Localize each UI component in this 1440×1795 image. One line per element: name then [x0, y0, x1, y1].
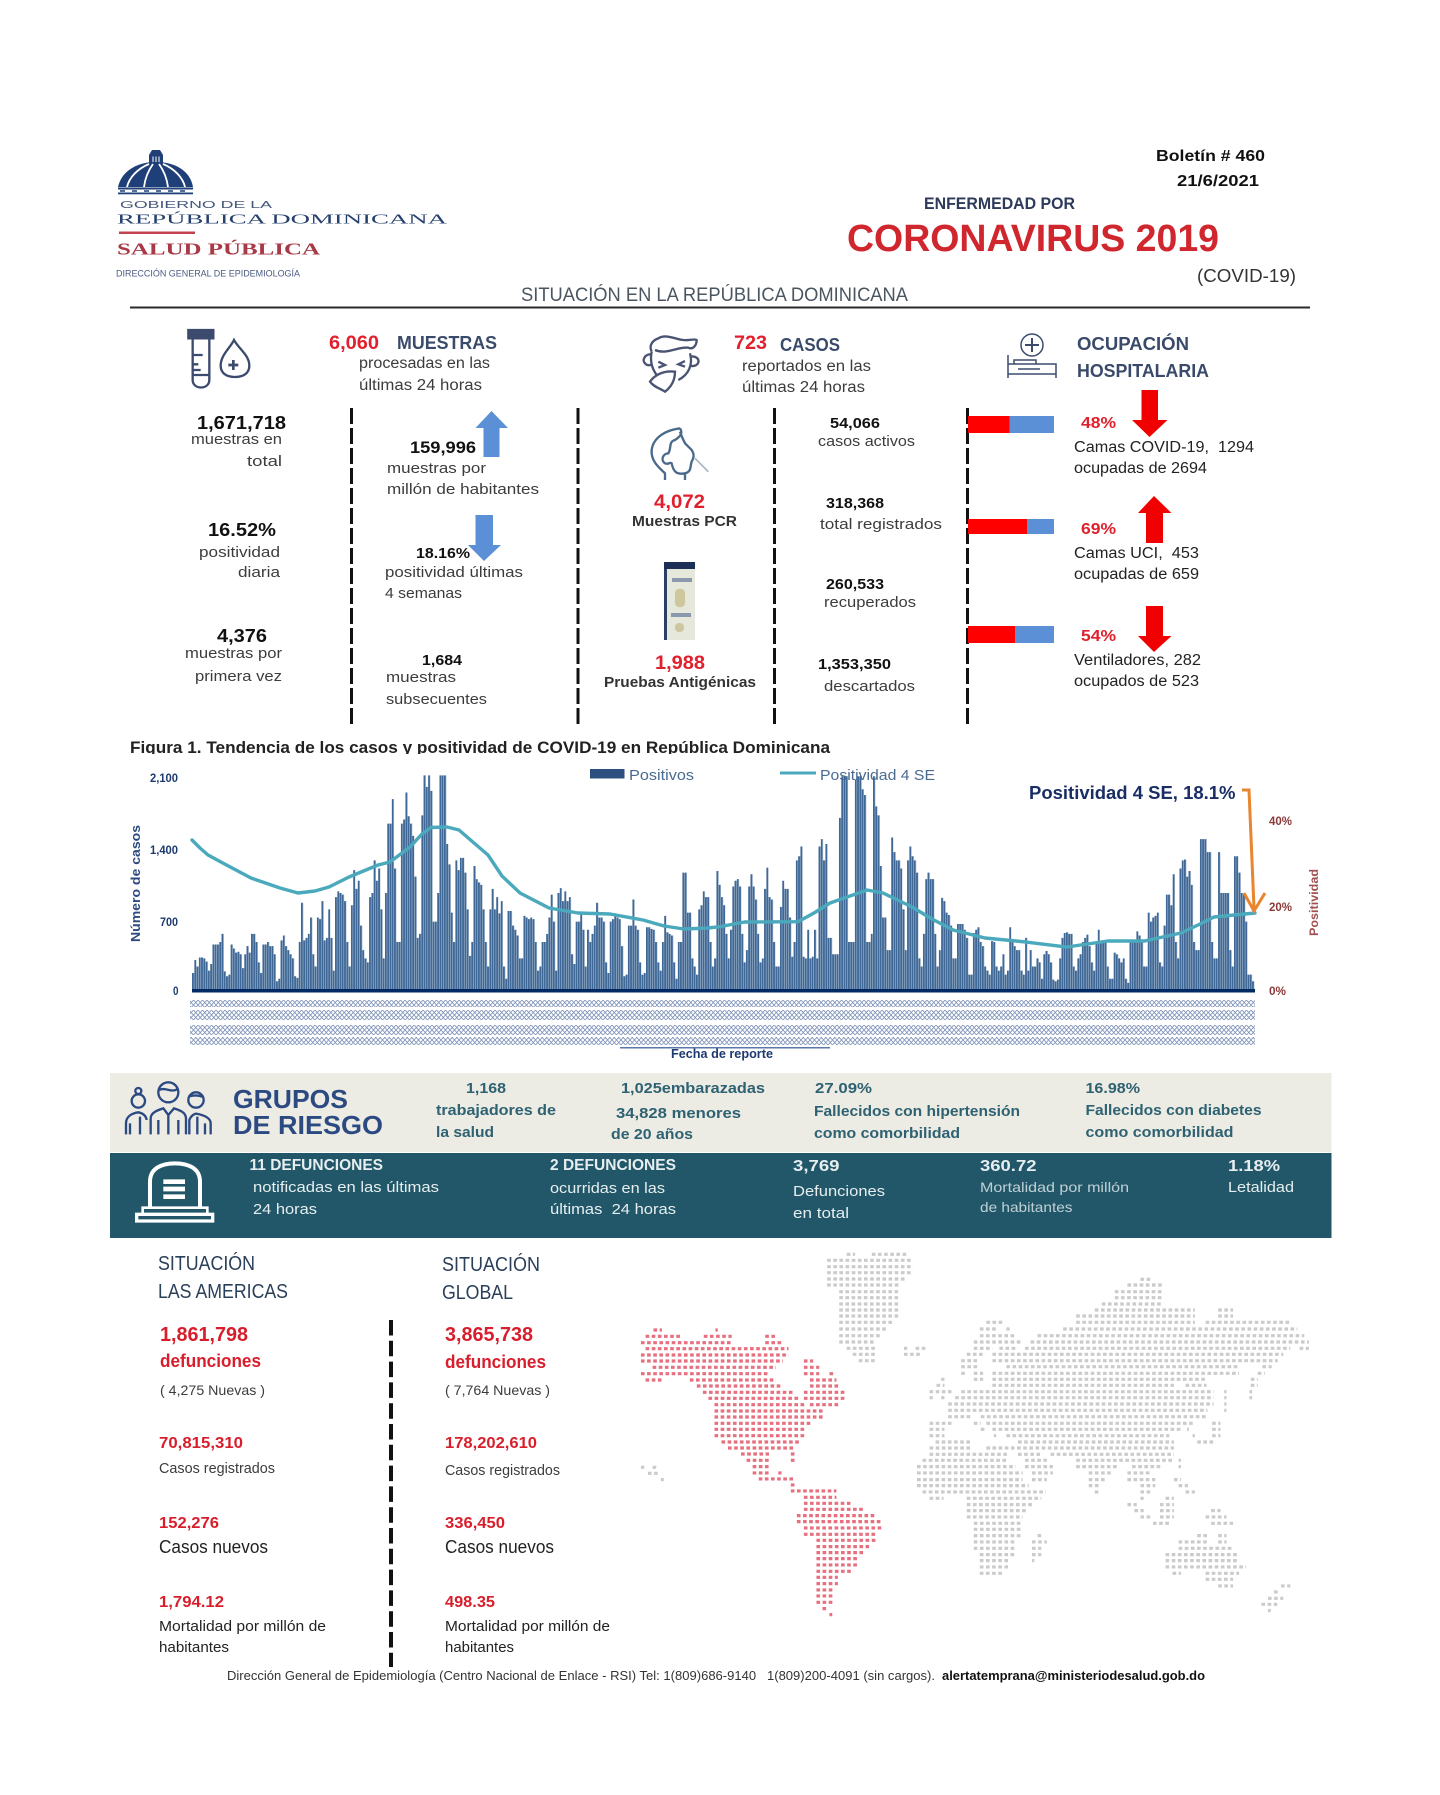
stat: camas COVID-19: 48%	[1081, 415, 1116, 432]
stat: descartados: descartados	[824, 678, 915, 695]
title	[847, 195, 1296, 286]
stat: defunciones global: 3,865,738	[445, 1324, 533, 1346]
left axis labels: 700	[160, 915, 178, 929]
bulletin number and date: 21/6/2021	[1177, 173, 1259, 190]
stat: casos activos	[818, 415, 915, 450]
stat: muestras por millón: millón de habitantes	[387, 481, 539, 498]
dashed column dividers	[352, 408, 968, 728]
dashed divider between regions	[389, 1320, 393, 1667]
stat: trabajadores de la salud	[436, 1080, 556, 1141]
footer contact line: alertatemprana@ministeriodesalud.gob.do	[942, 1668, 1205, 1683]
stat: trabajadores de la salud: 1,168	[466, 1080, 506, 1097]
stat: defunciones en total: en total	[793, 1205, 849, 1222]
stat: 2 defunciones: ocurridas en las	[550, 1180, 665, 1197]
title: ENFERMEDAD POR	[924, 195, 1075, 213]
left axis labels: 1,400	[150, 843, 178, 857]
logo text: Salud Pública: SALUD PÚBLICA	[117, 240, 320, 258]
left axis labels: 2,100	[150, 771, 178, 785]
stat: mortalidad por millón: 360.72	[980, 1158, 1036, 1175]
stat: casos registrados global: 178,202,610	[445, 1435, 537, 1452]
stat: defunciones américas: defunciones	[160, 1351, 261, 1371]
panel: situación las américas	[158, 1252, 326, 1656]
stat: ventiladores	[1074, 628, 1201, 690]
heading: situación las américas	[158, 1252, 288, 1303]
stat: positividad diaria: positividad	[199, 544, 280, 561]
heading: ocupación hospitalaria	[1077, 333, 1209, 381]
stat: positividad diaria: diaria	[238, 564, 281, 581]
stat: muestras en total: muestras en	[191, 431, 282, 448]
stat: trabajadores de la salud: trabajadores de	[436, 1102, 556, 1119]
stat: descartados	[818, 656, 915, 695]
stat: casos nuevos américas	[159, 1515, 268, 1557]
icon: face with mask	[644, 336, 698, 392]
heading: 6,060 muestras: MUESTRAS	[397, 333, 497, 353]
stat: casos nuevos américas: 152,276	[159, 1515, 219, 1532]
stat: 11 defunciones	[250, 1157, 439, 1218]
arrow: red up 69%	[1138, 496, 1172, 543]
stat: casos activos: casos activos	[818, 433, 915, 450]
stat: total registrados: total registrados	[820, 516, 942, 533]
stat: muestras por primera vez	[185, 626, 282, 685]
right axis title: positividad: Positividad	[1307, 869, 1321, 936]
stat: muestras en total	[191, 413, 286, 470]
stat: pruebas antigénicas	[604, 653, 756, 691]
stat: defunciones global: ( 7,764 Nuevas )	[445, 1382, 550, 1398]
stat: camas COVID-19	[1074, 415, 1254, 477]
stat: casos registrados américas: 70,815,310	[159, 1435, 243, 1452]
stat: defunciones global	[445, 1324, 550, 1398]
stat: muestras en total: total	[247, 453, 282, 470]
stat: camas UCI: ocupadas de 659	[1074, 566, 1199, 583]
heading: 6,060 muestras	[329, 333, 497, 394]
stat: muestras subsecuentes: muestras	[386, 669, 456, 686]
arrow: blue up	[476, 411, 508, 457]
bulletin number and date: Boletín # 460	[1156, 148, 1265, 165]
heading: 723 casos: reportados en las	[742, 358, 871, 375]
stat: casos nuevos global: 336,450	[445, 1515, 505, 1532]
heading: ocupación hospitalaria: HOSPITALARIA	[1077, 361, 1209, 381]
stat: muestras PCR	[632, 492, 737, 530]
stat: descartados: 1,353,350	[818, 656, 891, 673]
stat: hipertensión: 27.09%	[815, 1080, 872, 1097]
icon: nasal swab	[652, 428, 708, 480]
stat: positividad últimas 4 semanas	[385, 545, 523, 602]
heading: grupos de riesgo: GRUPOS	[233, 1084, 348, 1114]
stat: defunciones en total: Defunciones	[793, 1183, 885, 1200]
stat: casos nuevos global	[445, 1515, 554, 1557]
stat: recuperados: 260,533	[826, 576, 884, 593]
stat: embarazadas y menores: 34,828 menores	[616, 1105, 741, 1122]
heading: grupos de riesgo: DE RIESGO	[233, 1110, 383, 1140]
chart: casos y positividad	[128, 767, 1321, 1061]
stat: casos registrados global: Casos registrados	[445, 1463, 560, 1479]
logo text: Gobierno de la: GOBIERNO DE LA	[120, 200, 273, 211]
arrow: red down 54%	[1138, 606, 1172, 652]
stat: 11 defunciones: 24 horas	[253, 1201, 317, 1218]
bar: camas UCI 69%	[968, 519, 1054, 534]
red divider	[119, 232, 195, 234]
stat: muestras subsecuentes: subsecuentes	[386, 691, 487, 708]
stat: casos registrados américas: Casos registrados	[159, 1461, 275, 1477]
stat: mortalidad américas: Mortalidad por millón de	[159, 1618, 326, 1635]
axis title: fecha de reporte: Fecha de reporte	[671, 1047, 773, 1061]
bulletin number and date	[1156, 148, 1265, 190]
stat: ventiladores: 54%	[1081, 628, 1116, 645]
legend: positivos	[590, 767, 694, 784]
panel: ocupación hospitalaria	[968, 333, 1254, 690]
right axis labels: 0%	[1269, 984, 1286, 998]
map: the Americas (red)	[641, 1330, 882, 1615]
stat: muestras subsecuentes	[386, 653, 487, 708]
icon: antigen test strip	[664, 562, 695, 640]
logo: Gobierno de la República Dominicana, Salud Pública	[116, 150, 447, 280]
stat: mortalidad por millón: Mortalidad por millón	[980, 1179, 1129, 1195]
heading: ocupación hospitalaria: OCUPACIÓN	[1077, 333, 1189, 354]
stat: mortalidad por millón: de habitantes	[980, 1199, 1072, 1215]
legend: positividad 4 SE: Positividad 4 SE	[820, 767, 935, 784]
stat: embarazadas y menores: 1,025embarazadas	[621, 1080, 765, 1097]
stat: letalidad: 1.18%	[1228, 1158, 1280, 1175]
stat: diabetes: como comorbilidad	[1086, 1124, 1234, 1141]
x axis date labels	[190, 1000, 1255, 1048]
panel: muestras	[185, 330, 539, 708]
stat: muestras por primera vez: primera vez	[195, 668, 282, 685]
dotted world map	[641, 1254, 1309, 1615]
stat: total registrados	[820, 495, 942, 533]
heading: 6,060 muestras: 6,060	[329, 333, 379, 354]
stat: mortalidad por millón	[980, 1158, 1129, 1215]
stat: casos activos: 54,066	[830, 415, 880, 432]
stat: camas UCI: Camas UCI, 453	[1074, 545, 1199, 562]
stat: muestras por millón: muestras por	[387, 460, 486, 477]
heading: 723 casos: últimas 24 horas	[742, 379, 865, 396]
stat: muestras subsecuentes: 1,684	[422, 653, 462, 669]
positivity line	[192, 827, 1255, 947]
stat: muestras por primera vez: 4,376	[217, 626, 267, 646]
right axis labels	[1269, 814, 1292, 998]
heading: 6,060 muestras: últimas 24 horas	[359, 377, 482, 394]
icon: hospital bed	[1008, 334, 1056, 378]
heading: 6,060 muestras: procesadas en las	[359, 355, 490, 372]
stat: defunciones en total: 3,769	[793, 1158, 840, 1175]
right axis labels: 40%	[1269, 814, 1292, 828]
arrow: red down 48%	[1132, 390, 1168, 437]
stat: muestras por millón: 159,996	[410, 438, 476, 457]
stat: mortalidad américas	[159, 1594, 326, 1656]
stat: camas COVID-19: Camas COVID-19, 1294	[1074, 439, 1254, 456]
stat: diabetes: Fallecidos con diabetes	[1086, 1102, 1262, 1119]
stat: mortalidad américas: habitantes	[159, 1639, 229, 1656]
stat: pruebas antigénicas: Pruebas Antigénicas	[604, 674, 756, 691]
subtitle: Situación en la República Dominicana: SITUACIÓN EN LA REPÚBLICA DOMINICANA	[521, 284, 908, 306]
stat: hipertensión	[814, 1080, 1020, 1142]
stat: embarazadas y menores	[611, 1080, 765, 1143]
stat: muestras por millón	[387, 438, 539, 498]
icon: three people	[126, 1082, 211, 1134]
stat: casos registrados global	[445, 1435, 560, 1479]
map: rest of world (grey)	[641, 1254, 1309, 1611]
stat: pruebas antigénicas: 1,988	[655, 653, 705, 674]
stat: letalidad: Letalidad	[1228, 1179, 1294, 1196]
figure heading: Figura 1. Tendencia de los casos y positividad de COVID-19 en República Dominicana	[130, 738, 831, 757]
stat: positividad diaria: 16.52%	[208, 520, 276, 540]
arrow: orange callout	[1242, 790, 1265, 911]
stat: 2 defunciones	[550, 1157, 676, 1218]
stat: camas UCI	[1074, 521, 1199, 583]
stat: ventiladores: Ventiladores, 282	[1074, 652, 1201, 669]
stat: defunciones américas	[160, 1324, 265, 1398]
stat: defunciones américas: 1,861,798	[160, 1324, 248, 1346]
heading: 723 casos: CASOS	[780, 335, 840, 355]
stat: positividad últimas 4 semanas: 18.16%	[416, 545, 470, 562]
panel: defunciones	[110, 1153, 1332, 1238]
panel: casos	[604, 333, 942, 695]
stat: 11 defunciones: 11 DEFUNCIONES	[250, 1157, 383, 1174]
stat: recuperados: recuperados	[824, 594, 916, 611]
stat: ventiladores: ocupados de 523	[1074, 673, 1199, 690]
bar: camas COVID 48%	[968, 416, 1054, 433]
x axis baseline	[192, 989, 1255, 992]
heading: situación global: GLOBAL	[442, 1282, 513, 1304]
left axis title: número de casos: Número de casos	[128, 825, 143, 942]
heading: grupos de riesgo	[233, 1084, 383, 1140]
stat: defunciones global: defunciones	[445, 1352, 546, 1372]
stat: letalidad	[1228, 1158, 1294, 1196]
stat: embarazadas y menores: de 20 años	[611, 1126, 693, 1143]
callout: positividad 4 SE 18.1%: Positividad 4 SE, 18.1%	[1029, 783, 1236, 803]
heading: situación las américas: LAS AMERICAS	[158, 1281, 288, 1303]
stat: mortalidad global: habitantes	[445, 1639, 514, 1656]
stat: hipertensión: Fallecidos con hipertensión	[814, 1103, 1020, 1120]
heading: situación las américas: SITUACIÓN	[158, 1252, 255, 1275]
stat: trabajadores de la salud: la salud	[436, 1124, 494, 1141]
stat: 2 defunciones: 2 DEFUNCIONES	[550, 1157, 676, 1174]
stat: 11 defunciones: notificadas en las últimas	[253, 1179, 439, 1196]
icon: dome	[118, 150, 193, 194]
logo text: Dirección General de Epidemiología: DIRECCIÓN GENERAL DE EPIDEMIOLOGÍA	[116, 268, 301, 280]
right axis labels: 20%	[1269, 900, 1292, 914]
arrow: blue down	[468, 515, 501, 561]
left axis labels: 0	[173, 984, 179, 998]
bars: casos positivos por día	[192, 775, 1254, 991]
stat: recuperados	[824, 576, 916, 611]
stat: positividad diaria	[199, 520, 281, 581]
heading: 723 casos	[734, 333, 871, 396]
stat: positividad últimas 4 semanas: 4 semanas	[385, 585, 462, 602]
heading: 723 casos: 723	[734, 333, 767, 354]
heading: situación global: SITUACIÓN	[442, 1253, 540, 1276]
stat: defunciones américas: ( 4,275 Nuevas )	[160, 1382, 265, 1398]
stat: positividad últimas 4 semanas: positividad últimas	[385, 564, 523, 581]
stat: diabetes	[1086, 1080, 1262, 1141]
title: CORONAVIRUS 2019	[847, 218, 1219, 260]
panel: grupos de riesgo	[110, 1073, 1332, 1152]
stat: camas COVID-19: ocupadas de 2694	[1074, 460, 1207, 477]
footer contact line: Dirección General de Epidemiología (Centro Nacional de Enlace - RSI) Tel: 1(809)686-9140 1(809)200-4091 (sin cargos).	[227, 1668, 935, 1683]
stat: casos nuevos global: Casos nuevos	[445, 1537, 554, 1557]
stat: muestras en total: 1,671,718	[197, 413, 286, 433]
stat: diabetes: 16.98%	[1086, 1080, 1140, 1097]
icon: test tube and drop	[188, 330, 249, 387]
stat: hipertensión: como comorbilidad	[814, 1125, 960, 1142]
stat: 2 defunciones: últimas 24 horas	[550, 1201, 676, 1218]
legend: positivos: Positivos	[629, 767, 694, 784]
heading: situación global	[442, 1253, 540, 1304]
stat: muestras por primera vez: muestras por	[185, 645, 282, 662]
logo text: República Dominicana: REPÚBLICA DOMINICANA	[117, 212, 447, 226]
stat: camas UCI: 69%	[1081, 521, 1116, 538]
stat: mortalidad global: 498.35	[445, 1594, 495, 1611]
bar: ventiladores 54%	[968, 626, 1054, 643]
stat: mortalidad américas: 1,794.12	[159, 1594, 224, 1611]
stat: defunciones en total	[793, 1158, 885, 1222]
left axis labels	[150, 771, 179, 998]
stat: muestras PCR: Muestras PCR	[632, 513, 737, 530]
panel: situación global	[442, 1253, 610, 1656]
stat: muestras PCR: 4,072	[654, 492, 705, 513]
stat: mortalidad global: Mortalidad por millón de	[445, 1618, 610, 1635]
icon: tombstone	[137, 1163, 213, 1221]
stat: casos registrados américas	[159, 1435, 275, 1477]
title: (COVID-19)	[1197, 266, 1296, 286]
stat: total registrados: 318,368	[826, 495, 884, 512]
stat: mortalidad global	[445, 1594, 610, 1656]
stat: casos nuevos américas: Casos nuevos	[159, 1537, 268, 1557]
